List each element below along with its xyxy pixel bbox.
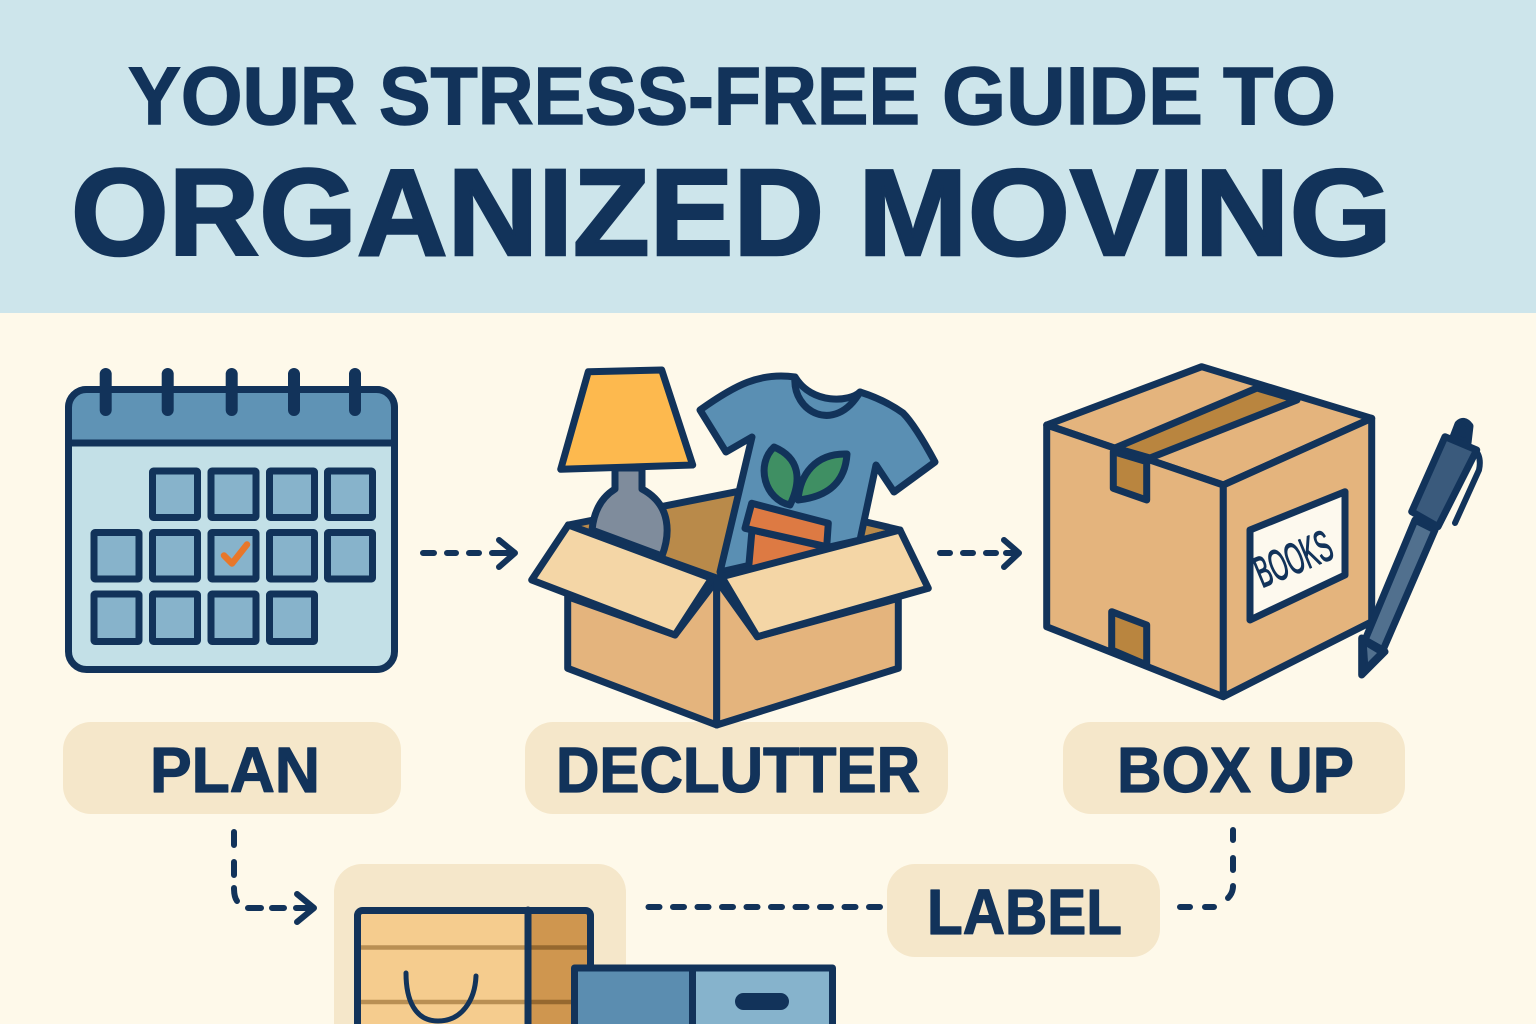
icon: wooden cabinet [358, 910, 590, 1024]
title line 1: GUIDE [942, 51, 1203, 142]
dashed connector: organize to label [648, 904, 882, 910]
lamp base [592, 468, 667, 556]
step label: label [887, 864, 1160, 957]
icon: bag handle [406, 973, 476, 1021]
title line 2: MOVING [858, 145, 1392, 282]
title line 2: ORGANIZED [71, 145, 824, 282]
packing tape [1115, 388, 1297, 458]
box interior [568, 492, 900, 578]
title line 2 [71, 145, 1392, 282]
step label: label: LABEL [927, 876, 1122, 948]
title line 1: STRESS-FREE [379, 51, 920, 142]
title line 1: TO [1223, 51, 1336, 142]
step label: box up [1063, 722, 1405, 814]
step label: declutter: DECLUTTER [556, 734, 920, 806]
box front panels [568, 580, 717, 725]
icon: orange check mark [224, 544, 247, 564]
icon: sealed box labelled books [1047, 367, 1372, 697]
plant pot [748, 530, 826, 575]
icon: pen [1362, 421, 1480, 675]
arrow: plan to declutter [423, 540, 515, 567]
step label: box up: BOX UP [1117, 734, 1354, 806]
arrow: declutter to box up [940, 540, 1019, 567]
icon: calendar [68, 374, 394, 670]
box label: BOOKS [1247, 521, 1340, 597]
lamp shade [561, 370, 693, 469]
dashed connector: box up down to label [1180, 830, 1233, 907]
step label: plan [63, 722, 401, 814]
t-shirt [700, 376, 935, 572]
icon: open box with lamp, shirt and plant [532, 370, 935, 725]
icon: blue storage box [574, 968, 832, 1024]
title line 1 [128, 51, 1336, 142]
box flaps [532, 525, 712, 635]
title line 1: YOUR [128, 51, 357, 142]
header banner with title [0, 0, 1536, 313]
arrow: plan down to organize tile [234, 832, 314, 922]
box label [1247, 492, 1345, 620]
plant leaves [764, 447, 797, 505]
organize tile with storage icons [334, 864, 832, 1024]
step label: plan: PLAN [150, 734, 320, 806]
